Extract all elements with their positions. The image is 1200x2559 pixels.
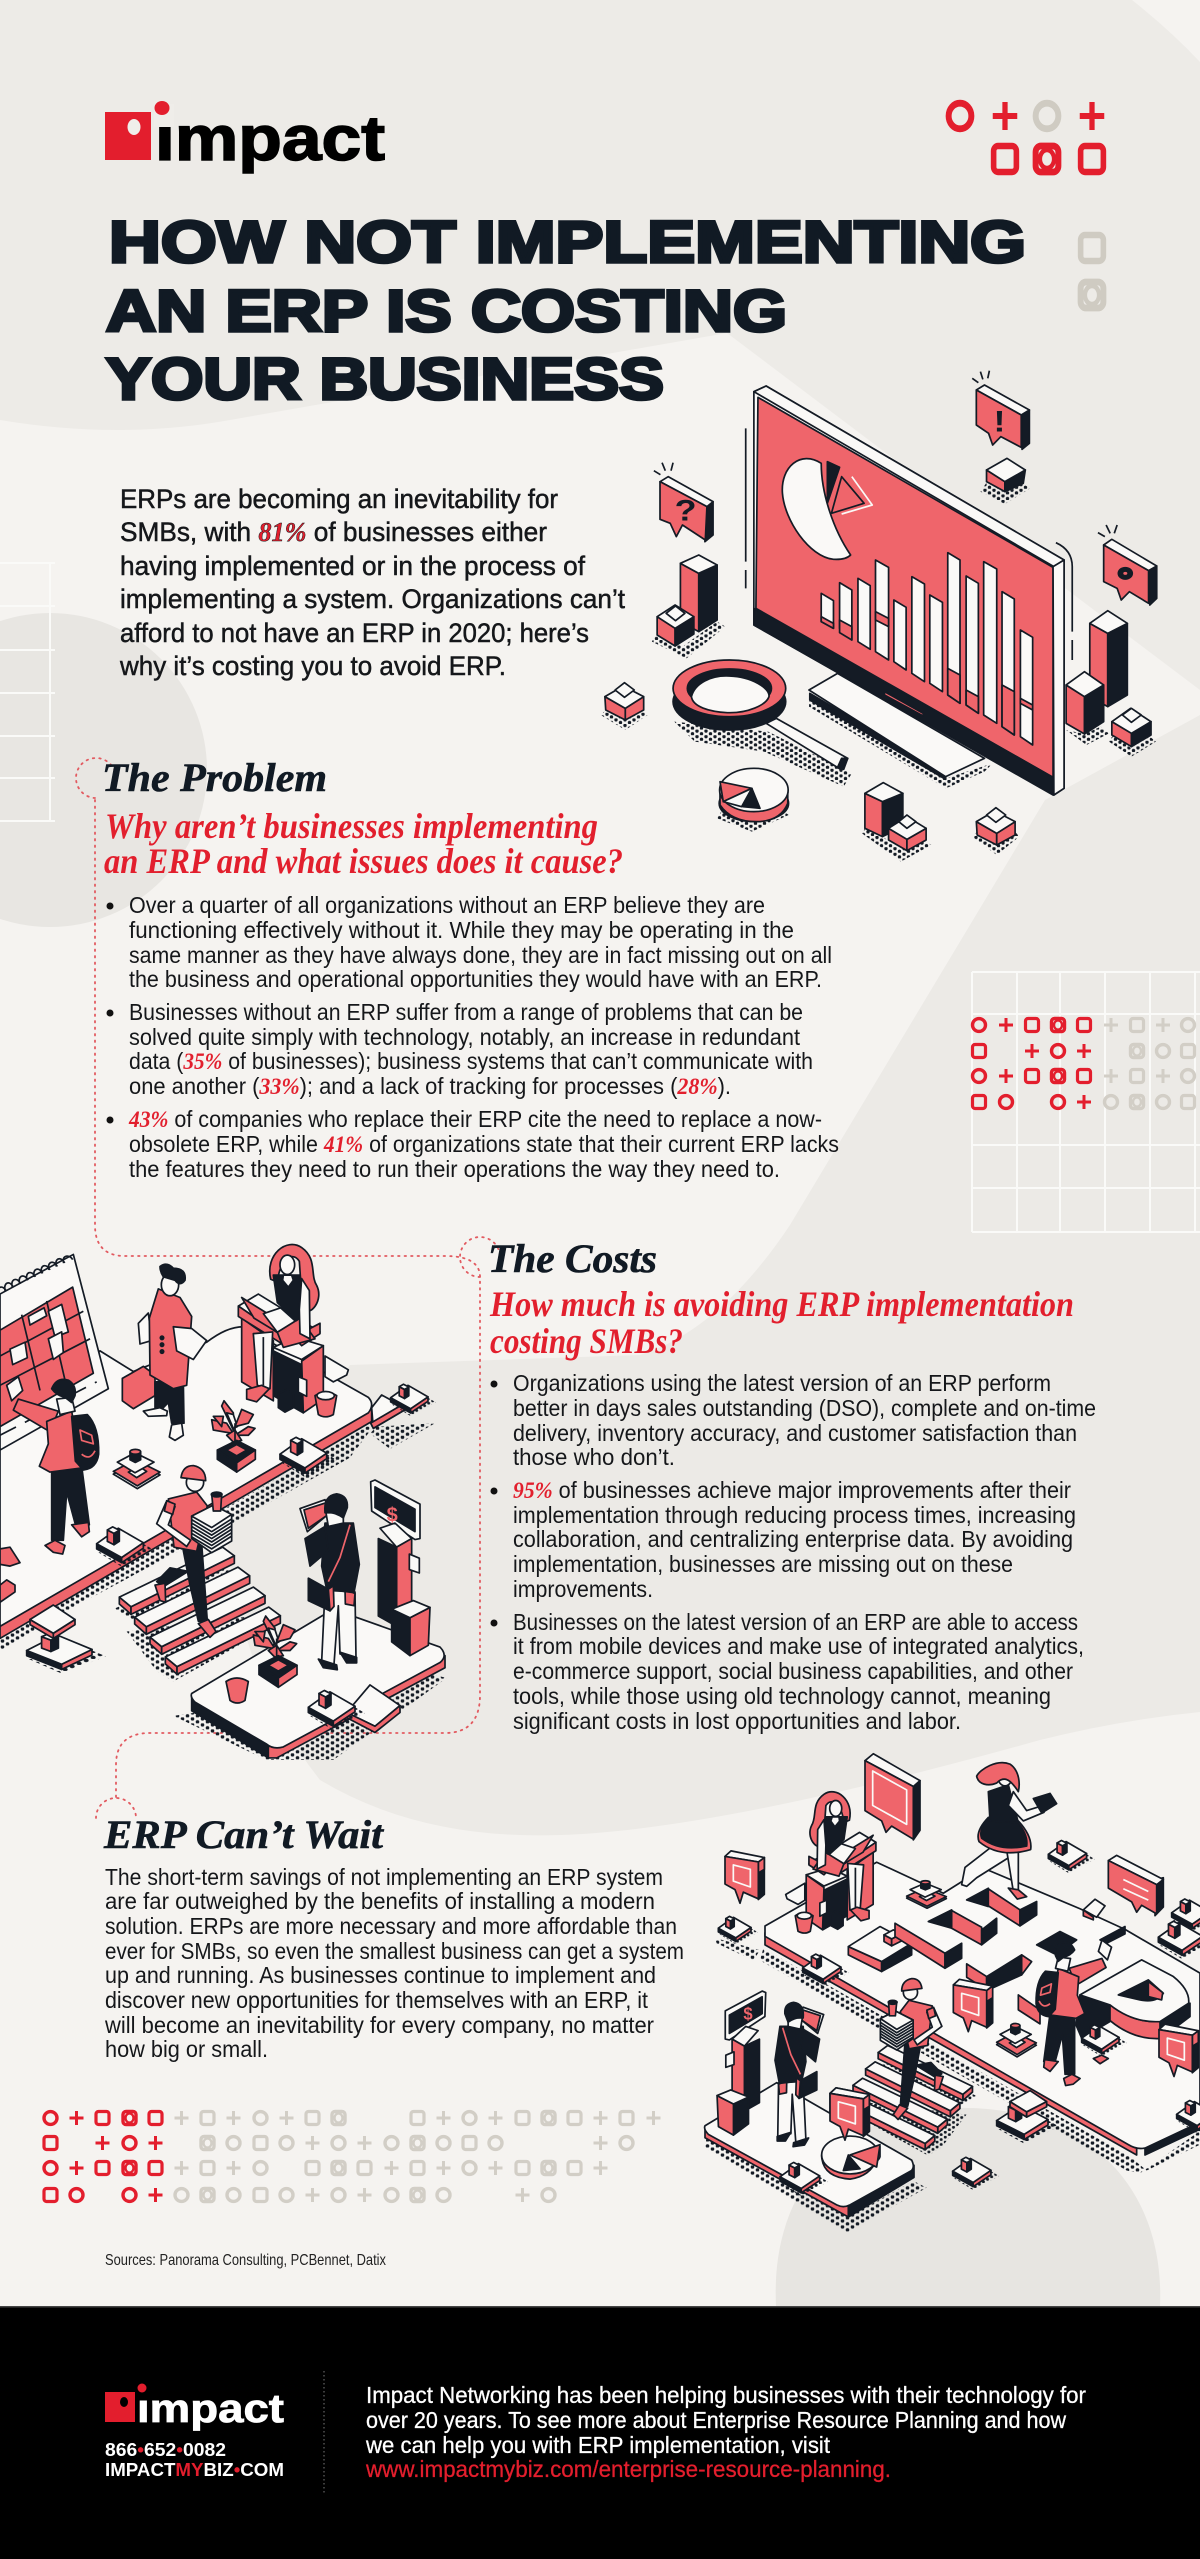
bullet list: better in days sales outstanding (DSO), complete and on-time <box>513 1395 1096 1421</box>
title <box>106 210 1026 412</box>
footer logo <box>105 2384 284 2431</box>
bullet list: improvements. <box>513 1576 653 1602</box>
stairs <box>840 2045 977 2156</box>
person with backpack <box>1036 1940 1112 2086</box>
contact details: IMPACTMYBIZ•COM <box>105 2460 284 2480</box>
body text: solution. ERPs are more necessary and more affordable than <box>105 1913 677 1939</box>
delivery person <box>155 1466 232 1637</box>
bullet list: implementation through reducing process times, increasing <box>513 1502 1076 1528</box>
pie chart <box>822 2136 880 2179</box>
letter R <box>967 1899 1125 2024</box>
bullet list: the business and operational opportunities they would have with an ERP. <box>129 966 822 992</box>
question bubble <box>660 477 713 542</box>
person with backpack <box>7 1377 99 1554</box>
bullet list: data (35% of businesses); business systems that can’t communicate with <box>129 1048 813 1075</box>
footer text: we can help you with ERP implementation, visit <box>365 2432 830 2458</box>
dotted connector path <box>76 758 500 1818</box>
letter E <box>848 1888 1037 1972</box>
small tiles <box>0 1437 337 1674</box>
person reading at kiosk <box>717 1991 824 2147</box>
intro text: SMBs, with 81% of businesses either <box>120 517 547 547</box>
bullet list: delivery, inventory accuracy, and customer satisfaction than <box>513 1420 1077 1446</box>
body text <box>104 1864 684 2062</box>
bullet list: Organizations using the latest version of an ERP perform <box>513 1370 1051 1396</box>
bullet list: it from mobile devices and make use of integrated analytics, <box>513 1633 1084 1659</box>
heading: The Costs <box>488 1236 657 1281</box>
subheading <box>489 1284 1074 1361</box>
bullet list: functioning effectively without it. While they may be operating in the <box>129 917 794 943</box>
pattern: lower icon grid <box>44 2111 660 2202</box>
bullet list: implementation, businesses are missing out on these <box>513 1551 1013 1577</box>
woman with laptop <box>238 1244 348 1417</box>
subheading: costing SMBs? <box>490 1321 683 1361</box>
letter P <box>1076 1960 1190 2039</box>
bullet list: tools, while those using old technology cannot, meaning <box>513 1683 1051 1709</box>
stairs <box>113 1547 280 1681</box>
alert bubble <box>654 371 1117 537</box>
monitor <box>746 386 1072 795</box>
bullet list: Businesses on the latest version of an ERP are able to access <box>513 1609 1078 1635</box>
gear bubble <box>1104 539 1157 605</box>
bullet list: significant costs in lost opportunities and labor. <box>513 1708 961 1734</box>
body text: ever for SMBs, so even the smallest business can get a system <box>105 1938 684 1964</box>
upper platform <box>0 1327 436 1650</box>
bullet list: the features they need to run their operations the way they need to. <box>129 1156 780 1182</box>
intro text: afford to not have an ERP in 2020; here’s <box>120 618 589 648</box>
plant <box>212 1401 255 1472</box>
speech bubbles <box>725 1754 1198 2140</box>
logo: impact <box>155 104 385 174</box>
lower platform <box>705 2083 927 2232</box>
bullet list: e-commerce support, social business capabilities, and other <box>513 1658 1073 1684</box>
sources: Sources: Panorama Consulting, PCBennet, Datix <box>105 2252 386 2269</box>
small cubes and columns <box>601 458 1156 862</box>
calendar <box>0 1254 108 1450</box>
footer text: Impact Networking has been helping businesses with their technology for <box>366 2382 1086 2408</box>
contact details: 866•652•0082 <box>105 2440 226 2460</box>
section: the costs <box>488 1236 1096 1734</box>
tiles on lower platform <box>308 1685 400 1732</box>
body text: are far outweighed by the benefits of installing a modern <box>105 1888 655 1914</box>
subheading: Why aren’t businesses implementing <box>105 806 598 846</box>
body text: The short-term savings of not implementing an ERP system <box>105 1864 663 1890</box>
intro text: ERPs are becoming an inevitability for <box>120 484 558 514</box>
bullet list: those who don’t. <box>513 1444 675 1470</box>
intro text <box>119 484 625 681</box>
bullet list <box>490 1370 1096 1734</box>
subheading: How much is avoiding ERP implementation <box>489 1284 1074 1324</box>
bullet list: obsolete ERP, while 41% of organizations state that their current ERP lacks <box>129 1131 839 1158</box>
illustration: people on isometric platforms: $ <box>387 1504 398 1526</box>
woman with laptop <box>786 1792 876 1933</box>
pie chart <box>717 768 789 832</box>
section: ERP can't wait <box>103 1812 684 2062</box>
bullet list: solved quite simply with technology, notably, an increase in redundant <box>129 1024 800 1050</box>
bullet list: Businesses without an ERP suffer from a range of problems that can be <box>129 999 803 1025</box>
footer <box>0 2306 1200 2559</box>
title: AN ERP IS COSTING <box>106 279 787 344</box>
body text: up and running. As businesses continue to implement and <box>105 1962 656 1988</box>
bullet list <box>106 892 839 1182</box>
title: HOW NOT IMPLEMENTING <box>109 210 1026 275</box>
body text: will become an inevitability for every company, no matter <box>104 2012 654 2038</box>
illustration: ERP letters with people: $ <box>743 2004 753 2024</box>
footer text: www.impactmybiz.com/enterprise-resource-planning. <box>365 2456 891 2482</box>
woman walking with book <box>962 1763 1057 1899</box>
footer text <box>365 2382 1086 2482</box>
papers <box>113 1449 160 1489</box>
intro text: implementing a system. Organizations can’t <box>120 584 625 614</box>
person reading at kiosk <box>300 1480 430 1670</box>
footer text: over 20 years. To see more about Enterprise Resource Planning and how <box>366 2407 1067 2433</box>
delivery person <box>880 1979 943 2119</box>
ERP letters <box>848 1888 1190 2039</box>
section: the problem <box>102 755 839 1182</box>
big platform <box>715 1862 1200 2173</box>
decorative grids <box>0 563 1200 1232</box>
illustration: people on isometric platforms <box>0 1244 447 1760</box>
plant and bin <box>226 1616 297 1703</box>
illustration: ERP letters with people <box>705 1754 1200 2232</box>
title: YOUR BUSINESS <box>106 347 664 412</box>
intro text: why it’s costing you to avoid ERP. <box>119 651 506 681</box>
bullet list: one another (33%); and a lack of tracking for processes (28%). <box>129 1073 731 1100</box>
bullet list: same manner as they have always done, they are in fact missing out on all <box>129 942 832 968</box>
logo <box>105 101 385 174</box>
bullet list: collaboration, and centralizing enterprise data. By avoiding <box>513 1526 1073 1552</box>
bullet list: Over a quarter of all organizations without an ERP believe they are <box>129 892 765 918</box>
heading: ERP Can’t Wait <box>103 1812 385 1857</box>
small tiles <box>718 1840 1200 2196</box>
hero illustration: monitor and charts <box>601 371 1157 862</box>
bullet list: 95% of businesses achieve major improvements after their <box>513 1477 1071 1504</box>
intro text: having implemented or in the process of <box>120 551 585 581</box>
footer logo: impact <box>137 2387 284 2431</box>
alert bubble: ! <box>993 405 1005 438</box>
header icon cluster <box>949 102 1104 308</box>
body text: how big or small. <box>105 2036 268 2062</box>
doctor with briefcase <box>122 1264 207 1440</box>
subheading: an ERP and what issues does it cause? <box>104 841 623 881</box>
question bubble: ? <box>675 494 697 527</box>
subheading <box>104 806 623 881</box>
pattern: right icon grid <box>972 1018 1194 1109</box>
lower platform <box>173 1609 447 1760</box>
bullet list: 43% of companies who replace their ERP cite the need to replace a now- <box>128 1106 822 1133</box>
contact details <box>105 2440 284 2480</box>
heading: The Problem <box>102 755 327 800</box>
body text: discover new opportunities for themselves with an ERP, it <box>105 1987 648 2013</box>
magnifying glass <box>673 660 852 787</box>
